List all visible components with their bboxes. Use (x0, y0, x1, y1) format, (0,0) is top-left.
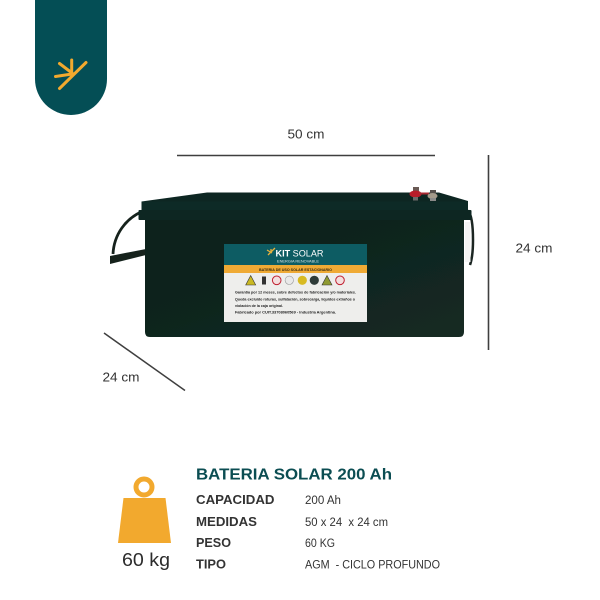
battery lid (142, 192, 468, 211)
row: capacity (196, 493, 341, 507)
battery body (145, 220, 464, 337)
row: weight: PESO (196, 536, 231, 550)
label text (235, 291, 356, 315)
label orange band (224, 265, 367, 273)
dimension: height line: 24 cm (516, 242, 552, 256)
corner tab with logo (35, 0, 107, 115)
label logo (267, 248, 275, 255)
handle gap (465, 222, 470, 262)
product label: BATERIA DE USO SOLAR ESTACIONARIO (259, 268, 332, 272)
row: type: AGM - CICLO PROFUNDO (305, 560, 440, 572)
label text: Garantía por 12 meses, sobre defectos de fabricación y/o materiales. (235, 291, 356, 295)
label teal header (224, 244, 367, 266)
label text: Fabricado por CUIT.33708060569 - Industria Argentina. (235, 311, 336, 315)
battery photo (110, 187, 473, 337)
product label (224, 244, 367, 322)
row: measures: 50 x 24 x 24 cm (305, 517, 388, 529)
label text: violación de la caja original. (235, 304, 283, 308)
row: capacity: 200 Ah (305, 495, 341, 507)
weight icon (118, 479, 171, 543)
dimension: depth line: 24 cm (102, 370, 140, 384)
row: weight: 60 KG (305, 538, 335, 550)
row: measures: MEDIDAS (196, 515, 257, 529)
right handle (468, 210, 473, 265)
label hazard icons (246, 276, 344, 285)
label body (224, 273, 367, 322)
row: type (196, 558, 440, 572)
dimension: depth line (102, 333, 185, 390)
dimension: width line: 50 cm (288, 128, 324, 142)
teal tab (35, 0, 107, 115)
product title: BATERIA SOLAR 200 Ah (196, 466, 392, 484)
row: type: TIPO (196, 558, 226, 572)
row: measures (196, 515, 388, 529)
lid band (138, 210, 472, 220)
row: weight (196, 536, 335, 550)
icon: solar spark (56, 60, 86, 88)
label text: Queda excluido roturas, sulfatación, sobrecarga, líquidos extraños o (235, 297, 356, 301)
terminals (410, 187, 438, 201)
product label: ENERGIA RENOVABLE (277, 259, 320, 263)
row: capacity: CAPACIDAD (196, 493, 274, 507)
specs table (196, 493, 440, 572)
left handle (110, 212, 146, 264)
weight value: 60 kg (122, 549, 170, 570)
product label: KIT SOLAR (276, 248, 324, 260)
